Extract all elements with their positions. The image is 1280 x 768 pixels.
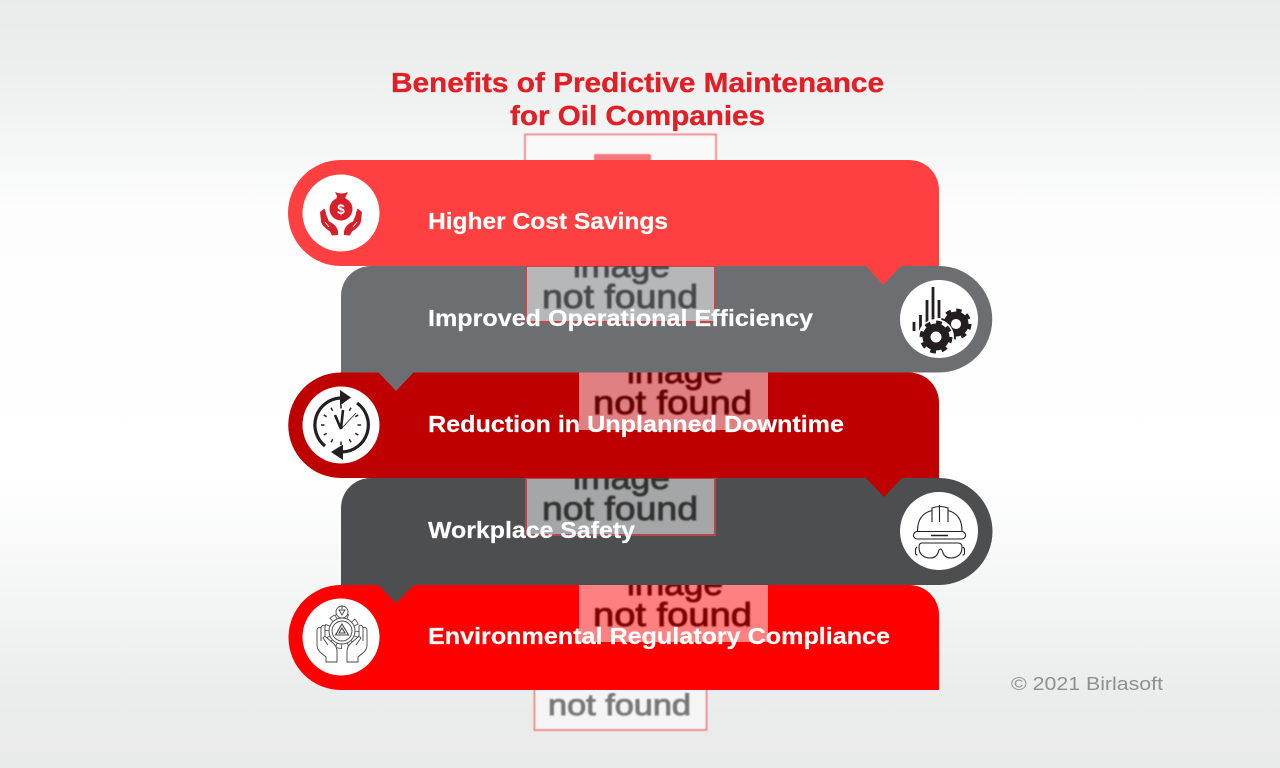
placeholder image over panel 5	[579, 565, 768, 642]
panel: environmental regulatory compliance	[288, 565, 939, 690]
placeholder image: bottom	[534, 680, 706, 730]
pointer	[378, 372, 414, 391]
icon: safety helmet and goggles	[914, 505, 966, 558]
panel: improved operational efficiency	[341, 247, 992, 391]
placeholder image top	[525, 134, 716, 164]
placeholder image: bottom: not found	[548, 689, 691, 722]
icon circle: gears	[900, 280, 978, 358]
placeholder image over panel 4	[526, 459, 715, 535]
placeholder image over panel 2: image	[573, 247, 670, 284]
placeholder image over panel 3: image	[627, 353, 723, 390]
panel: higher cost savings	[288, 160, 939, 285]
icon: money bag in hands	[320, 192, 362, 236]
panel: reduction in unplanned downtime	[288, 353, 939, 497]
placeholder image over panel 5: not found	[593, 596, 752, 633]
icon circle: savings	[302, 174, 380, 252]
icon: hands holding recycling gear	[317, 606, 367, 662]
pointer	[378, 585, 414, 603]
icon: clock with cycle arrows	[315, 390, 368, 460]
placeholder image over panel 5: image	[627, 565, 723, 602]
placeholder image over panel 3	[579, 353, 768, 430]
panel: workplace safety	[341, 459, 992, 603]
icon: money bag in hands: $	[337, 202, 345, 217]
label: workplace safety: Workplace Safety	[428, 517, 635, 543]
icon circle: clock	[302, 386, 380, 464]
label: improved operational efficiency: Improved Operational Efficiency	[428, 305, 813, 331]
title: Benefits of Predictive Maintenance	[391, 67, 884, 98]
placeholder image over panel 2	[526, 247, 715, 322]
title: for Oil Companies	[510, 100, 765, 131]
placeholder image over panel 4: not found	[542, 490, 698, 527]
placeholder image over panel 2: not found	[542, 278, 698, 315]
label: higher cost savings: Higher Cost Savings	[428, 208, 668, 234]
pointer	[866, 478, 902, 497]
copyright: © 2021 Birlasoft	[1011, 673, 1163, 694]
icon circle: safety	[900, 492, 978, 570]
label: environmental regulatory compliance: Environmental Regulatory Compliance	[428, 623, 890, 649]
icon circle: environment	[302, 598, 380, 676]
title	[391, 67, 884, 131]
icon: gears and bars	[914, 287, 970, 355]
label: reduction in unplanned downtime: Reduction in Unplanned Downtime	[428, 411, 844, 437]
pointer	[866, 266, 901, 285]
placeholder image over panel 3: not found	[593, 384, 752, 421]
placeholder image over panel 4: image	[573, 459, 670, 496]
